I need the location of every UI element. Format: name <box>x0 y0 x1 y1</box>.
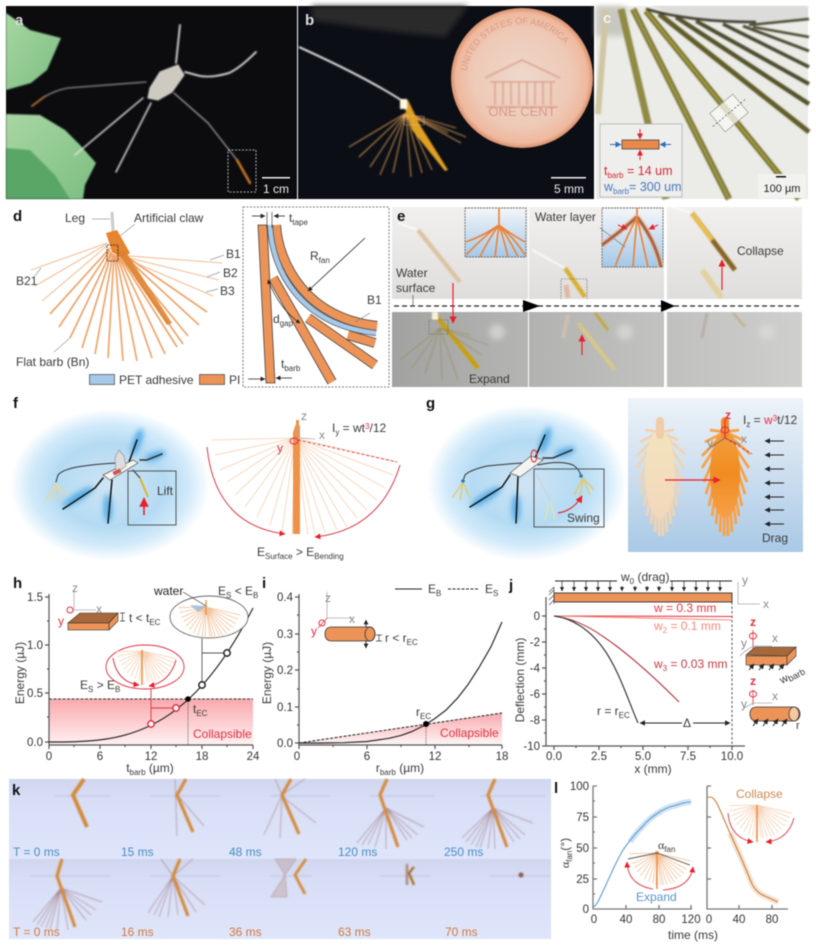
labels: barbs: B1 <box>226 247 241 261</box>
time labels collapse: T = 0 ms <box>13 925 60 939</box>
inset: cylinder: r < r <box>385 631 407 645</box>
fan inset collapse <box>728 787 794 842</box>
fan illustration <box>31 212 222 361</box>
lower row: collapsing fan <box>33 859 524 930</box>
left tick labels: 80 <box>653 914 665 926</box>
fan inset with alpha: fan <box>664 845 675 854</box>
angle axis title: fan <box>565 851 574 862</box>
legend: E <box>485 582 493 596</box>
tick labels: 12 <box>145 751 157 763</box>
labels: t_EC and Collapsible <box>193 702 252 741</box>
bending diagram: collapsed fan: y <box>277 441 283 455</box>
tick labels <box>523 611 743 763</box>
tick labels: -10 <box>523 741 540 753</box>
text labels: Expand <box>469 372 510 386</box>
drag diagram: I <box>743 413 746 427</box>
label: E_S greater than E_B with red ellipse <box>80 645 184 694</box>
left tick labels: 25 <box>576 874 589 886</box>
bending diagram: collapsed fan: > E <box>293 545 314 559</box>
tick labels: 18 <box>196 751 208 763</box>
collapsible region <box>49 699 253 745</box>
axis titles <box>260 642 424 777</box>
axis titles: Energy (µJ) <box>260 642 274 704</box>
legend: materials <box>90 373 240 387</box>
axis titles: Energy (µJ) <box>13 642 27 704</box>
barbs <box>598 9 809 199</box>
label: Leg <box>65 211 110 225</box>
inset: flat beam: barb <box>786 667 807 684</box>
labels: r_EC and Collapsible: EC <box>420 712 431 721</box>
bending diagram: collapsed fan: E <box>257 545 265 559</box>
inset: block: EC <box>149 618 161 627</box>
robot on water with swing box: Swing <box>567 511 600 525</box>
label: t_barb: barb <box>284 364 301 373</box>
beam with load: 0 <box>630 577 635 586</box>
tick labels: -4 <box>530 663 541 675</box>
inset: cross section: barb <box>607 171 624 180</box>
robot on water with lift box <box>10 409 210 561</box>
left tick labels: 0 <box>583 904 589 916</box>
curve labels: 3 <box>663 664 668 673</box>
inset: cross section: = 14 um <box>624 164 672 178</box>
axis titles: x (mm) <box>634 762 672 776</box>
tick labels: 2.5 <box>591 751 607 763</box>
beam with load: w <box>621 570 630 584</box>
time labels collapse: 16 ms <box>121 925 154 939</box>
label: t_tape <box>252 211 308 228</box>
coin <box>450 7 594 149</box>
schematic: barb layering <box>243 207 389 387</box>
curve labels: = 0.1 mm <box>667 619 721 633</box>
panel label j: j <box>508 577 513 594</box>
inset: cylinder: EC <box>407 638 418 647</box>
inset: flat beam: z <box>750 615 756 629</box>
tick labels: 0.0 <box>546 751 562 763</box>
label: B1 <box>355 293 382 322</box>
bending energy curve <box>299 622 502 743</box>
panel label i: i <box>262 575 266 592</box>
label: E_S less than E_B with gray ellipse <box>153 584 258 639</box>
label: t_tape: t <box>289 211 292 225</box>
left tick labels: 50 <box>576 843 589 855</box>
tick labels: -8 <box>530 715 540 727</box>
tick labels: 0.0 <box>27 737 43 749</box>
water backgrounds <box>392 312 802 387</box>
text labels: Collapse <box>737 244 784 258</box>
tick labels: -6 <box>530 689 540 701</box>
tick labels: 0.1 <box>277 702 293 714</box>
panel label b: b <box>305 12 314 29</box>
inset: block: y <box>58 614 64 628</box>
leg and fan <box>299 47 466 177</box>
inset: cylindrical beam: z <box>750 674 756 688</box>
inset: block: x <box>96 602 102 616</box>
left tick labels: 0 <box>591 914 597 926</box>
text labels: surface <box>396 281 436 295</box>
curve labels: w = 0.3 mm <box>653 601 716 615</box>
inset: flat beam: x <box>772 631 778 645</box>
bending diagram: collapsed fan: Bending <box>314 552 344 561</box>
tick labels: 5.0 <box>635 751 651 763</box>
labels: barbs: B21 <box>16 274 38 288</box>
beam with load: (drag) <box>634 570 669 584</box>
inset: cylindrical beam <box>741 674 800 732</box>
angle axis title: α <box>558 862 572 868</box>
drag diagram: z <box>725 408 731 422</box>
curve labels <box>597 601 727 720</box>
labels: barbs: Flat barb (Bn) <box>16 355 89 369</box>
leaves <box>6 13 96 199</box>
beam with load: x <box>763 597 769 611</box>
inset: cylinder: y <box>311 624 317 638</box>
axis titles <box>513 638 672 776</box>
inset: cylinder: z <box>325 591 331 605</box>
labels: r_EC and Collapsible: r <box>416 705 420 719</box>
tick labels: 0.3 <box>277 629 293 641</box>
time labels expansion: 48 ms <box>229 845 262 859</box>
left tick labels: 40 <box>620 914 632 926</box>
labels: barbs: B2 <box>223 266 238 280</box>
labels: t_EC and Collapsible: t <box>193 702 196 716</box>
coin: UNITED STATES OF AMERICA <box>460 18 568 70</box>
beam with load: y <box>742 573 748 587</box>
labels: r_EC and Collapsible <box>416 705 499 740</box>
time labels collapse: 70 ms <box>445 925 478 939</box>
inset: flat beam <box>740 615 807 688</box>
text labels <box>396 210 784 386</box>
panel k: high-speed frames <box>9 779 551 939</box>
axis titles: (µm) <box>146 761 174 775</box>
label: E_S greater than E_B with red ellipse: > E <box>93 678 115 692</box>
tick labels: 1.0 <box>27 640 43 652</box>
inset: water layer <box>602 208 663 267</box>
drag diagram: t/12 <box>777 413 797 427</box>
time axis title: time (ms) <box>668 928 718 942</box>
drag diagram: y <box>707 436 713 450</box>
tick labels: 18 <box>496 751 508 763</box>
scale bar: 5 mm <box>551 177 586 196</box>
label: B1: B1 <box>367 293 382 307</box>
panel label l: l <box>554 780 558 797</box>
axis titles: Deflection (mm) <box>513 638 527 722</box>
labels: barbs <box>16 247 241 369</box>
drag arrows <box>765 441 784 524</box>
drag diagram: w <box>763 413 773 427</box>
label: Artificial claw: Artificial claw <box>134 211 204 225</box>
delta span <box>640 716 730 730</box>
inset: cross section <box>600 124 682 197</box>
time labels expansion: 15 ms <box>121 845 154 859</box>
water surface lines <box>30 796 550 876</box>
inset: cross section: = 300 um <box>629 180 682 194</box>
robot legs and body <box>32 25 256 183</box>
inset: expanded fan <box>465 208 526 257</box>
drag diagram: 3 <box>773 414 778 423</box>
label: E_S greater than E_B with red ellipse: S <box>88 685 93 694</box>
tick labels: 12 <box>429 751 441 763</box>
inset: block <box>58 581 161 630</box>
labels: barbs: B3 <box>220 284 235 298</box>
critical radius marker <box>423 721 429 727</box>
tick labels: 0.2 <box>277 665 293 677</box>
label: R_fan: fan <box>319 256 330 265</box>
label: E_S greater than E_B with red ellipse: E <box>80 678 88 692</box>
surface energy dashed line <box>299 713 502 743</box>
tick labels: 0 <box>534 611 540 623</box>
inset: cylinder <box>311 591 418 648</box>
bending diagram: collapsed fan <box>207 409 400 561</box>
curve labels: r = r <box>597 704 619 718</box>
axis titles: barb <box>380 768 396 777</box>
panel label c: c <box>603 10 611 27</box>
axes <box>542 597 745 750</box>
inset: block: z <box>72 581 78 595</box>
curve labels: w <box>654 657 663 671</box>
label: E_S less than E_B with gray ellipse: B <box>253 591 258 600</box>
panel a: robot photo <box>6 6 297 199</box>
panel g: swing <box>426 395 803 561</box>
inset: cylindrical beam: y <box>741 697 747 711</box>
bending diagram: collapsed fan: = wt <box>339 421 366 435</box>
right tick labels: 40 <box>733 914 745 926</box>
labels: t_EC and Collapsible: EC <box>196 709 208 718</box>
panel label h: h <box>13 575 22 592</box>
label: t_tape: tape <box>292 218 308 227</box>
water surface line <box>392 299 802 312</box>
scale bar: 1 cm <box>262 177 290 196</box>
axis titles: r <box>376 761 380 775</box>
inset: cross section: w <box>604 180 613 194</box>
fan inset with alpha <box>627 838 693 904</box>
drag diagram: = <box>750 413 764 427</box>
fan inset collapse: Collapse <box>736 787 783 801</box>
fan frames <box>398 207 745 380</box>
label: d_gap <box>268 280 300 328</box>
right tick labels: 0 <box>706 914 712 926</box>
inset: flat beam: w <box>778 672 790 687</box>
inset: flat beam: y <box>741 636 747 650</box>
inset: cylinder: x <box>349 612 355 626</box>
frame backgrounds <box>9 779 551 939</box>
panel label g: g <box>426 395 435 412</box>
tick labels: 0.5 <box>27 688 43 700</box>
label: Leg: Leg <box>65 211 85 225</box>
label: R_fan <box>308 238 365 291</box>
panel b: fan beside a coin <box>297 1 595 200</box>
panel label k: k <box>12 782 21 799</box>
motion arrows <box>453 260 722 355</box>
panel i: energy versus radius chart <box>260 575 508 777</box>
beam with load <box>549 570 769 611</box>
panel l: fan angle versus time charts <box>554 780 794 942</box>
tick labels: 0.4 <box>277 592 294 604</box>
dashed selection box <box>228 150 256 192</box>
panel label e: e <box>397 208 405 225</box>
tick labels: 1.5 <box>27 592 43 604</box>
inset: cross section: t <box>604 164 607 178</box>
coin: ONE CENT <box>488 104 556 119</box>
curve labels: w <box>654 619 663 633</box>
curve labels: = 0.03 mm <box>667 657 727 671</box>
surface energy dashed line <box>49 698 253 700</box>
time labels expansion: 250 ms <box>444 845 483 859</box>
labels: r_EC and Collapsible: Collapsible <box>440 726 499 740</box>
collapsible region <box>299 713 502 745</box>
fan inset with alpha: Expand <box>636 890 677 904</box>
bending diagram: collapsed fan: /12 <box>369 421 386 435</box>
robot on water with swing box <box>427 405 627 561</box>
right tick labels: 80 <box>766 914 778 926</box>
air backgrounds <box>392 207 802 299</box>
inset: cylindrical beam: x <box>772 689 778 703</box>
label: Artificial claw <box>120 211 204 236</box>
left chart axes <box>593 786 692 909</box>
tick labels: 0 <box>294 751 300 763</box>
panel label d: d <box>13 208 22 225</box>
panel c: microscope image of barbs <box>596 6 809 199</box>
time labels collapse: 36 ms <box>229 925 262 939</box>
scale bar: 1 cm: 1 cm <box>263 182 289 196</box>
tick labels: 6 <box>97 751 103 763</box>
time labels expansion: 120 ms <box>338 845 377 859</box>
selection boxes <box>429 279 587 334</box>
inset: cross section: barb <box>613 187 630 196</box>
label: E_S less than E_B with gray ellipse: S <box>226 591 231 600</box>
drag diagram: x <box>741 432 747 446</box>
left tick labels <box>570 781 701 926</box>
axis titles <box>13 642 174 777</box>
bending diagram: collapsed fan: Surface <box>265 552 293 561</box>
legend: E <box>428 582 436 596</box>
text labels: Water layer <box>535 210 596 224</box>
drag diagram: Drag <box>762 531 788 545</box>
tick labels: 6 <box>364 751 370 763</box>
axis titles: t <box>126 761 130 775</box>
panel label a: a <box>15 12 24 29</box>
tick labels: 24 <box>247 751 260 763</box>
upper row: expanding fan <box>73 779 533 849</box>
robot on water with lift box: Lift <box>157 484 174 498</box>
scale bar: 5 mm: 5 mm <box>554 182 584 196</box>
label: E_S less than E_B with gray ellipse: E <box>218 584 226 598</box>
bright feather <box>702 417 750 536</box>
angle axis title: (°) <box>558 838 572 851</box>
zoom box on fan <box>107 245 118 261</box>
legend: S <box>493 589 498 598</box>
panel j: deflection chart <box>508 570 807 776</box>
panel d: fan design <box>13 207 389 387</box>
bending diagram: collapsed fan: I <box>332 421 335 435</box>
bending energy curve <box>49 608 253 742</box>
label: d_gap: d <box>273 312 280 326</box>
label: d_gap: gap <box>280 319 294 328</box>
label: E_S less than E_B with gray ellipse: < E <box>231 584 253 598</box>
bending diagram: collapsed fan: y <box>335 428 339 437</box>
tick labels: 0 <box>46 751 52 763</box>
right tick labels <box>706 914 778 926</box>
panel e: water entry sequence <box>392 207 802 387</box>
labels: t_EC and Collapsible: Collapsible <box>193 727 252 741</box>
tick labels: 10.0 <box>721 751 743 763</box>
time labels expansion <box>13 845 483 859</box>
axes <box>295 594 502 749</box>
axes <box>45 594 253 749</box>
bending diagram: collapsed fan: 3 <box>365 422 370 431</box>
drag diagram <box>628 398 803 552</box>
time labels collapse: 63 ms <box>338 925 371 939</box>
inset: cylindrical beam: r <box>796 720 800 732</box>
left tick labels: 120 <box>681 914 701 926</box>
panel label f: f <box>13 395 19 412</box>
legend: B <box>436 589 441 598</box>
label: t_barb <box>248 357 301 379</box>
tick labels <box>277 592 508 763</box>
collapse curve with band <box>707 797 778 902</box>
fan inset with alpha: α <box>658 838 664 852</box>
tick labels <box>27 592 260 763</box>
delta span: Δ <box>683 716 691 730</box>
panel f: lift <box>10 395 400 561</box>
section marker <box>705 90 753 136</box>
tick labels: 7.5 <box>680 751 696 763</box>
label: R_fan: R <box>310 249 319 263</box>
legend: materials: PI <box>229 373 240 387</box>
time labels collapse <box>13 925 478 939</box>
scale bar: 100 µm <box>758 174 806 198</box>
scale bar: 100 µm: 100 µm <box>764 183 800 195</box>
label: t_barb: t <box>281 357 284 371</box>
time labels expansion: T = 0 ms <box>13 845 60 859</box>
label: E_S greater than E_B with red ellipse: B <box>115 685 120 694</box>
tick labels: -2 <box>530 637 540 649</box>
bending diagram: collapsed fan: x <box>319 428 325 442</box>
axis titles: barb <box>130 768 146 777</box>
axis titles: (µm) <box>396 761 424 775</box>
panel h: energy versus thickness chart <box>13 575 260 777</box>
drag diagram: z <box>746 420 750 429</box>
text labels: Water <box>396 266 428 280</box>
faded feather <box>637 417 685 536</box>
legend <box>395 582 498 598</box>
left tick labels: 100 <box>570 781 589 793</box>
curves <box>554 616 732 723</box>
expansion curve with band <box>593 802 691 907</box>
left tick labels: 75 <box>576 812 589 824</box>
right chart axes <box>707 786 788 909</box>
label: E_S less than E_B with gray ellipse: water <box>153 584 183 598</box>
legend: materials: PET adhesive <box>119 373 194 387</box>
tick labels: 0.0 <box>277 738 293 750</box>
bending diagram: collapsed fan: z <box>301 409 307 423</box>
connectors and markers <box>148 638 230 727</box>
dashed selection box <box>404 116 424 125</box>
curve labels: EC <box>619 711 630 720</box>
inset: block: t < t <box>129 611 149 625</box>
curve labels: 2 <box>663 626 668 635</box>
